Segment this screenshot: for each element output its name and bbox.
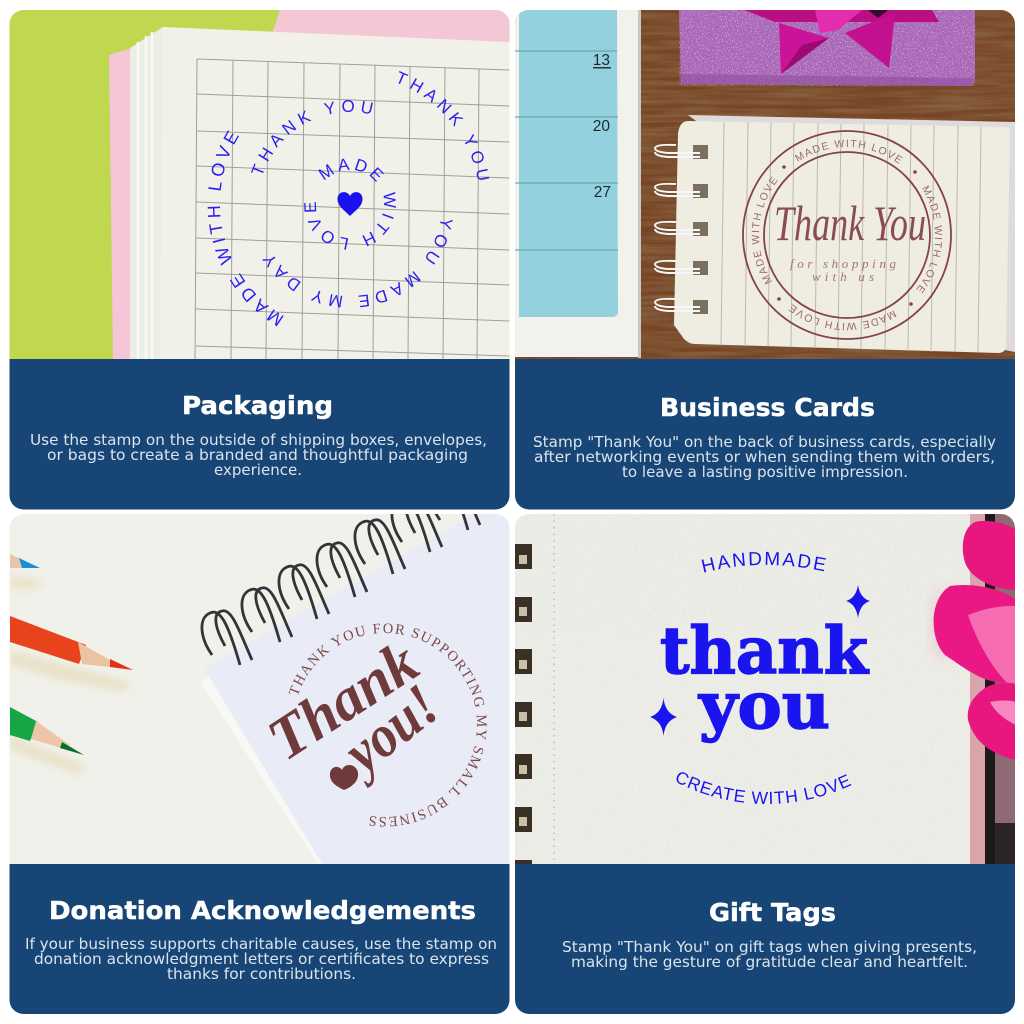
description: to leave a lasting positive impression. (622, 463, 908, 481)
description: experience. (214, 461, 302, 479)
stamp: spiral text and heart: MADE WITH LOVE (304, 158, 396, 250)
calendar (515, 10, 641, 358)
stamp: spiral text and heart: THANK YOU (250, 100, 373, 173)
stamp: round thank you seal (742, 130, 952, 340)
description: Stamp "Thank You" on the back of business cards, especially (533, 433, 996, 451)
heading: Gift Tags (709, 898, 836, 927)
stamp: round thank you seal: MADE WITH LOVE (752, 176, 778, 284)
panel: gift tags (515, 514, 1015, 1014)
stamp: round thank you seal: MADE WITH LOVE (794, 140, 903, 164)
heading: Donation Acknowledgements (49, 896, 476, 925)
gift box (679, 10, 975, 86)
panel: donation acknowledgements (10, 514, 510, 1014)
photo: textured page with flowers (515, 514, 1015, 864)
stamp: handmade thank you: thank (660, 613, 870, 689)
stamp: round thank you seal: MADE WITH LOVE (788, 304, 896, 330)
stamp: round thank you seal: with us (812, 269, 874, 284)
stamp: round thank you seal: Thank You (774, 195, 926, 251)
calendar: 27 (594, 184, 611, 201)
panel: business cards (515, 10, 1015, 510)
panel: packaging (10, 10, 510, 510)
photo: grid notebook with spiral stamp (10, 10, 510, 359)
book edge strip (970, 514, 1015, 865)
notebook binding holes (515, 544, 532, 865)
description: thanks for contributions. (167, 965, 356, 983)
coloured pencils (10, 554, 133, 775)
stamp: spiral text and heart: YOU MADE MY DAY (262, 220, 453, 308)
heading: Packaging (182, 391, 333, 420)
stamp: thank you script with circular text: Thank (256, 628, 430, 773)
stamp: thank you script with circular text: you! (327, 672, 451, 789)
calendar: 13 (593, 52, 610, 69)
stamp: spiral text and heart (208, 71, 490, 326)
grid lines (195, 59, 510, 360)
description: after networking events or when sending them with orders, (534, 448, 995, 466)
stamp: handmade thank you (650, 552, 870, 804)
description: making the gesture of gratitude clear and heartfelt. (571, 953, 968, 971)
description: If your business supports charitable causes, use the stamp on (25, 935, 497, 953)
description (533, 433, 996, 481)
caption card: gift tags (515, 864, 1015, 1014)
stamp: round thank you seal: for shopping (790, 256, 896, 271)
caption card: packaging (10, 359, 510, 510)
heading: Business Cards (660, 393, 875, 422)
stamp: spiral text and heart: THANK YOU (398, 71, 490, 180)
spiral binding (655, 145, 708, 314)
stamp: spiral text and heart: MADE WITH LOVE (208, 130, 284, 326)
spiral binding (200, 514, 482, 666)
caption card: business cards (515, 359, 1015, 510)
photo: notebook on wooden desk (515, 10, 1015, 359)
description (30, 431, 487, 479)
caption card: donation (10, 864, 510, 1014)
description (25, 935, 497, 983)
stamp: handmade thank you: HANDMADE (702, 552, 826, 572)
description: Stamp "Thank You" on gift tags when giving presents, (562, 938, 977, 956)
description: or bags to create a branded and thoughtful packaging (47, 446, 468, 464)
stamp: handmade thank you: you (698, 668, 830, 744)
notepad page (200, 677, 322, 864)
flowers (933, 521, 1016, 760)
calendar: 20 (593, 118, 610, 135)
stamp: handmade thank you: CREATE WITH LOVE (676, 772, 852, 804)
stamp: round thank you seal: MADE WITH LOVE (916, 186, 942, 294)
notebook (654, 115, 1015, 353)
stamp: thank you script with circular text: THANK YOU FOR SUPPORTING MY SMALL BUSINESS (288, 624, 487, 827)
description (562, 938, 977, 971)
description: donation acknowledgment letters or certificates to express (34, 950, 489, 968)
photo: spiral notepad with coloured pencils (10, 514, 510, 864)
description: Use the stamp on the outside of shipping boxes, envelopes, (30, 431, 487, 449)
